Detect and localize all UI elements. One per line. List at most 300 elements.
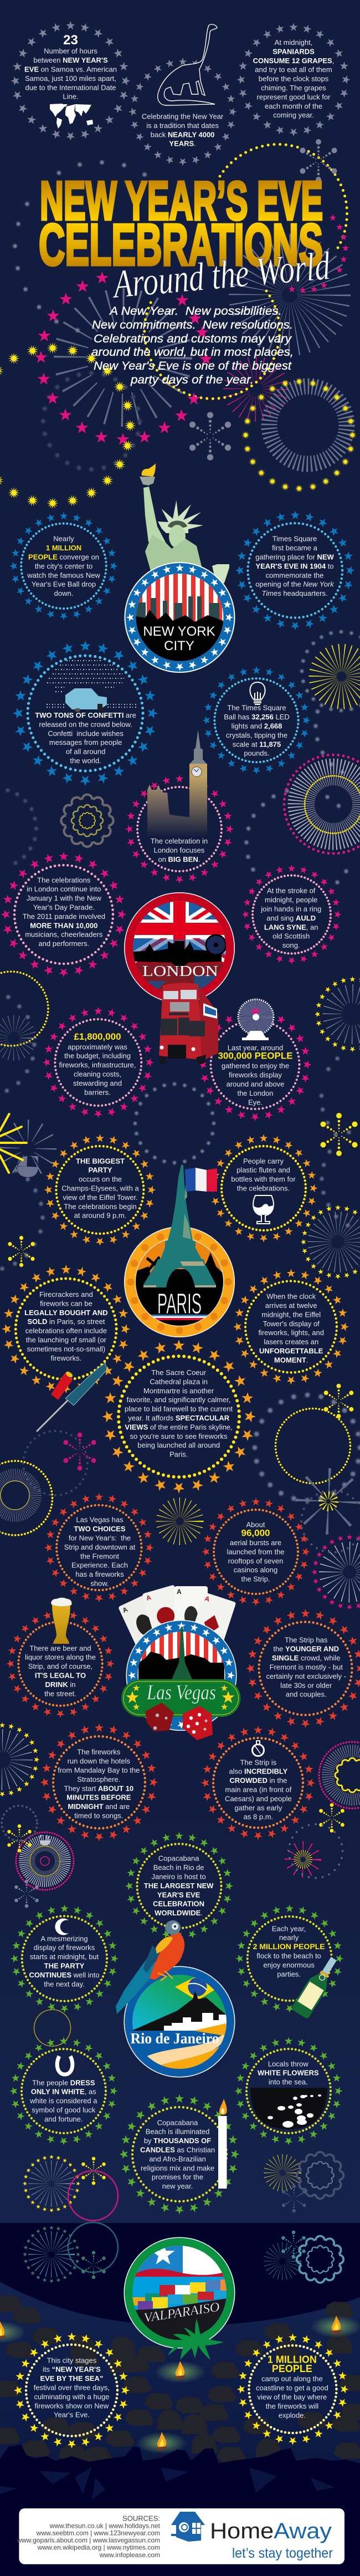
text: Ball: scale at 11,875: [233, 740, 281, 748]
panel: London budget: [43, 1007, 154, 1118]
panel: Copacabana largest celebration: [125, 1832, 233, 1940]
text: beer: IT'S LEGAL TO: [35, 1672, 86, 1680]
intro text: around the world, but in most places,: [91, 346, 294, 359]
text: younger and single: certainly not exclusively -: [266, 1672, 346, 1680]
text: parade: and performers.: [38, 939, 89, 948]
panel: unforgettable moment: [233, 1269, 349, 1385]
text: beer: There are beer and: [29, 1644, 91, 1652]
text: candles: religions mix and make: [141, 2164, 214, 2172]
icon: HomeAway house: [171, 2512, 205, 2542]
text: Auld Lang Syne: LANG SYNE, an: [264, 923, 318, 931]
panel: new year's eve by the sea: [14, 2332, 130, 2449]
text: younger and single: SINGLE crowd, while: [272, 1654, 340, 1662]
icon: London Eye: [238, 999, 274, 1040]
text: flowers: WHITE FLOWERS: [258, 2069, 319, 2077]
icon: French flag: [185, 1168, 217, 1192]
text: grapes: before the clock stops: [259, 75, 329, 83]
intro text: New Year's Eve is one of the biggest: [94, 360, 292, 372]
panel: Big Ben: [125, 730, 234, 883]
text: biggest party: view of the Eiffel Tower.: [63, 1193, 138, 1202]
text: by the sea: EVE BY THE SEA”: [40, 2374, 103, 2383]
fireworks behind title and intro: [0, 139, 357, 509]
text: Sacre Coeur: The Sacre Coeur: [151, 1368, 207, 1377]
text: Ball: crystals, tipping the: [226, 731, 287, 739]
panel: 300,000 people: [199, 999, 311, 1121]
text: 2 million: enjoy enormous: [263, 1961, 315, 1969]
text: largest: CELEBRATION: [153, 1900, 204, 1908]
fireworks: New York and London side decorations: [4, 629, 360, 886]
campfires: [0, 2316, 360, 2454]
text: budget: fireworks, infrastructure,: [59, 1061, 136, 1069]
text: camp out: the fireworks will: [266, 2402, 318, 2410]
text: flutes: plastic flutes and: [236, 1166, 290, 1174]
sources: SOURCES:: [122, 2514, 160, 2522]
text: 1 million: Nearly: [53, 535, 74, 543]
text: largest: WORLDWIDE.: [155, 1909, 203, 1917]
Paris badge with Eiffel Tower: [124, 1165, 235, 1337]
text: biggest party: PARTY: [88, 1166, 112, 1174]
text: confetti: messages from people: [49, 738, 122, 747]
text: grapes: each month of the: [265, 102, 322, 110]
Valparaiso badge: [124, 2237, 235, 2360]
text: firecrackers: sometimes not-so-small): [27, 1345, 105, 1353]
text: budget: the budget, including: [64, 1052, 131, 1060]
text: aerial bursts: aerial bursts are: [230, 1539, 281, 1547]
fireworks: London and Paris side decorations: [0, 972, 360, 1279]
text: candles: new year.: [162, 2182, 193, 2190]
text: Times Square: Times Square: [272, 535, 317, 543]
text: aerial bursts: casinos along: [234, 1566, 277, 1574]
text: flowers: into the sea.: [269, 2078, 308, 2086]
logo: HomeAway: HomeAway: [210, 2519, 332, 2543]
text: Sacre Coeur: Montmartre is another: [143, 1387, 214, 1395]
text: two choices: Las Vegas has: [76, 1516, 124, 1524]
text: mesmerizing: the next day.: [44, 1980, 85, 1988]
text: largest: THE LARGEST NEW: [144, 1882, 214, 1890]
panel: firecrackers: [2, 1265, 130, 1432]
text: hours between Samoa: Number of hours: [44, 47, 97, 55]
text: aerial bursts: the Strip.: [241, 1575, 270, 1583]
text: crowded: gather as early: [234, 1803, 282, 1812]
text: two choices: for New Year's: the: [69, 1534, 131, 1542]
text: younger and single: The Strip has: [285, 1635, 328, 1644]
text: mesmerizing: CONTINUES well into: [29, 1971, 100, 1979]
text: last year: 300,000 PEOPLE: [218, 1051, 293, 1061]
text: 1 million: down.: [54, 589, 73, 597]
icon: flowers on the sea: [250, 2088, 327, 2129]
panel: thousands of candles: [120, 2094, 239, 2215]
icon: rocket and firecracker: [37, 1363, 107, 1432]
text: younger and single: late 30s or older: [280, 1681, 332, 1689]
footer panel: [16, 2508, 344, 2564]
text: 1 million: watch the famous New: [27, 571, 100, 579]
text: last year: Last year, around: [228, 1044, 283, 1052]
text: candles: by THOUSANDS OF: [144, 2137, 211, 2145]
text: Eiffel display: arrives at twelve: [265, 1301, 317, 1310]
text: last year: gathered to enjoy the: [222, 1062, 289, 1070]
icon: Vegas badge: [126, 1620, 237, 1731]
panel: 1 million people: [9, 512, 118, 620]
text: confetti: Confetti include wishes: [48, 729, 124, 738]
panel: Spanish grapes: [236, 23, 351, 136]
text: tradition: YEARS.: [169, 140, 196, 148]
text: firecrackers: fireworks can be: [40, 1299, 92, 1307]
text: candles: promises for the: [152, 2173, 203, 2181]
text: parade: MORE THAN 10,000: [30, 921, 97, 929]
icon: horseshoe: [57, 2056, 73, 2074]
panel: fireworks timed to songs: [40, 1724, 158, 1841]
text: 2 million: flock to the beach to: [256, 1952, 321, 1960]
panel: 1 million people camp: [237, 2333, 348, 2445]
text: hours between Samoa: Line.: [63, 93, 79, 101]
sources: www.seebtm.com | www.123newyear.com: [36, 2529, 160, 2537]
text: firecrackers: celebrations often include: [25, 1327, 107, 1335]
text: Las Vegas: Las Vegas: [146, 1681, 216, 1704]
text: confetti: TWO TONS OF CONFETTI are: [35, 711, 136, 719]
text: mesmerizing: A mesmerizing: [40, 1934, 88, 1943]
sources: www.infoplease.com: [99, 2551, 160, 2559]
text: Sacre Coeur: Paris.: [169, 1450, 188, 1459]
text: last year: fireworks display: [229, 1071, 282, 1079]
text: Times Square: opening of the New York: [255, 580, 334, 589]
text: parade: musicians, cheerleaders: [25, 931, 103, 939]
rocks: [0, 2296, 360, 2463]
text: Rio de Janeiro: Rio de Janeiro: [131, 2030, 219, 2047]
text: Eiffel display: lasers creates an: [264, 1338, 318, 1346]
text: 2 million: nearly: [279, 1934, 299, 1942]
sources: www.thesun.co.uk | www.holidays.net: [49, 2522, 161, 2530]
text: Sacre Coeur: VIEWS of the entire Paris skyline,: [125, 1423, 233, 1431]
title: [39, 170, 323, 278]
text: flutes: People carry: [243, 1157, 284, 1165]
panel: dress only in white: [9, 2037, 118, 2145]
text: 1 million: 1 MILLION: [46, 544, 81, 552]
text: crowded: Caesars) and people: [225, 1795, 292, 1803]
panel: London parade: [1, 852, 126, 977]
text: 2 million: Each year,: [272, 1924, 306, 1933]
text: camp out: explode.: [279, 2411, 306, 2419]
icon: playing cards: A: [145, 1593, 152, 1602]
text: by the sea: culminating with a huge: [34, 2393, 109, 2401]
panel: the strip crowd: [246, 1609, 360, 1728]
text: crowded: also INCREDIBLY: [229, 1767, 287, 1776]
text: grapes: chiming. The grapes: [261, 84, 326, 92]
text: camp out: camp out along the: [261, 2375, 323, 2383]
text: beer: Strip, and of course,: [28, 1662, 92, 1670]
text: Paris: PARIS: [157, 1288, 202, 1320]
text: last year: Eye.: [248, 1098, 263, 1106]
text: Times Square: YEAR'S EVE IN 1904 to: [255, 562, 334, 570]
text: biggest party: occurs on the: [79, 1175, 122, 1183]
text: Ball: lights and 2,668: [232, 722, 282, 730]
text: 1 million: PEOPLE converge on: [28, 553, 99, 561]
panel: 2 million people: [235, 1904, 343, 2020]
text: largest: YEAR'S EVE: [157, 1890, 200, 1899]
text: beer: liquor stores along the: [25, 1653, 96, 1662]
text: biggest party: at around 9 p.m.: [74, 1212, 126, 1220]
text: Auld Lang Syne: join hands in a ring: [260, 904, 321, 913]
text: Times Square: Times headquarters.: [261, 589, 328, 597]
text: last year: the London: [237, 1089, 274, 1097]
text: London: LONDON: [142, 963, 218, 979]
text: Auld Lang Syne: At the stroke of: [267, 887, 316, 895]
text: camp out: PEOPLE: [272, 2363, 312, 2374]
fireworks: Paris and Vegas side decorations: [0, 1384, 360, 1797]
sources: [16, 2514, 161, 2559]
text: hours between Samoa: Samoa, just 100 miles apart,: [25, 74, 116, 83]
panel: two tons of confetti: [13, 641, 158, 786]
text: Auld Lang Syne: midnight, people: [265, 896, 317, 904]
text: parade: Year's Day Parade.: [33, 903, 95, 912]
text: by the sea: its “NEW YEAR'S: [43, 2365, 101, 2374]
text: hours between Samoa: between NEW YEAR'S: [33, 56, 108, 64]
icon: green plaque: [121, 1679, 240, 1717]
text: 1 million: the city's center to: [35, 562, 92, 570]
text: New York City: CITY: [164, 638, 194, 653]
text: budget: approximately was: [68, 1042, 127, 1051]
panel: 96,000 aerial bursts: [202, 1497, 310, 1606]
text: camp out: coastline to get a good: [256, 2384, 328, 2392]
text: younger and single: the YOUNGER AND: [273, 1645, 339, 1653]
text: aerial bursts: rooftops of seven: [228, 1557, 283, 1565]
icon: playing cards: [118, 1585, 236, 1649]
text: Sacre Coeur: favorite, and significantly calmer,: [127, 1396, 231, 1404]
text: timed to songs: MIDNIGHT and are: [68, 1802, 130, 1811]
text: tradition: is a tradition that dates: [146, 121, 219, 130]
icon: playing cards: A: [204, 1594, 211, 1603]
icon: Eiffel Tower: [143, 1165, 216, 1287]
text: Eiffel display: When the clock: [266, 1292, 316, 1301]
text: Auld Lang Syne: song.: [282, 941, 300, 949]
Valparaiso hillside: [0, 2282, 360, 2505]
text: Eiffel display: MOMENT.: [274, 1356, 308, 1364]
text: hours between Samoa: EVE on Samoa vs. American: [24, 65, 117, 73]
text: Times Square: commemorate the: [266, 571, 323, 579]
icon: NYC badge: [124, 562, 235, 673]
intro text: A New Year. New possibilities.: [109, 305, 282, 318]
text: Auld Lang Syne: and sing AULD: [266, 914, 316, 922]
text: timed to songs: from Mandalay Bay to the: [58, 1766, 140, 1774]
text: timed to songs: timed to songs.: [74, 1811, 123, 1819]
text: grapes: represent good luck for: [257, 93, 331, 101]
text: Big Ben: The celebration in: [151, 837, 208, 845]
icon: London badge: [124, 892, 235, 1003]
intro text: New commitments. New resolutions.: [92, 319, 293, 331]
text: Eiffel display: midnight, the Eiffel: [261, 1310, 321, 1318]
icon: confetti: [47, 661, 137, 707]
Valparaiso night background: [0, 2223, 360, 2576]
text: grapes: and try to eat all of them: [255, 65, 332, 74]
text: candles: Copacabana: [157, 2118, 198, 2127]
text: by the sea: festival over three days,: [34, 2383, 110, 2391]
fireworks: reflected in Valparaiso sky: [23, 2222, 343, 2283]
text: budget: cleaning costs,: [74, 1070, 121, 1079]
text: candles: Beach is illuminated: [146, 2128, 209, 2136]
text: by the sea: This city stages: [47, 2356, 97, 2364]
text: biggest party: Champs-Elysees, with a: [61, 1184, 139, 1193]
text: firecrackers: SOLD in Paris, so street: [27, 1317, 105, 1326]
panel: plastic flutes: [209, 1134, 318, 1243]
icon: Rio badge: [124, 1966, 235, 2077]
text: Valparaiso: VALPARAISO: [143, 2300, 220, 2325]
text: Sacre Coeur: year. It affords SPECTACULAR: [128, 1414, 229, 1422]
panel: tradition 4000 years: [128, 24, 237, 166]
text: Sacre Coeur: being launched all around: [137, 1441, 220, 1449]
text: parade: January 1 with the New: [27, 894, 101, 902]
text: dress in white: white is considered a: [29, 2097, 97, 2105]
panel: beer and liquor: [6, 1598, 115, 1718]
text: confetti: the world.: [70, 757, 101, 765]
text: timed to songs: They start ABOUT 10: [64, 1784, 133, 1792]
Las Vegas badge: [118, 1585, 240, 1740]
text: largest: Janeiro is host to: [151, 1872, 206, 1880]
text: biggest party: THE BIGGEST: [76, 1157, 125, 1165]
text: two choices: show.: [90, 1579, 109, 1587]
text: crowded: The Strip is: [240, 1758, 277, 1766]
text: budget: stewarding and: [73, 1079, 122, 1087]
text: younger and single: and couples.: [286, 1690, 327, 1699]
palm silhouettes: [0, 2445, 360, 2576]
text: dress in white: symbol of good luck: [32, 2106, 96, 2114]
intro text: party days of the year.: [130, 374, 254, 386]
icon: car: [65, 688, 107, 712]
icon: light bulb: [250, 682, 265, 704]
panel: the biggest party: [44, 1134, 156, 1246]
text: camp out: view of the bay where: [258, 2393, 327, 2401]
text: confetti: of all around: [66, 748, 105, 756]
text: two choices: Experience. Each: [71, 1561, 128, 1570]
panel: Times Square Ball: [202, 666, 311, 774]
sources: www.goparis.about.com | www.lasvegassun.com: [16, 2537, 160, 2544]
text: dress in white: and fortune.: [44, 2115, 83, 2123]
icon: Big Ben and Parliament: [147, 730, 207, 837]
text: flowers: Locals throw: [268, 2059, 308, 2068]
text: aerial bursts: About: [246, 1521, 265, 1529]
icon: crescent moon: [55, 1919, 69, 1935]
text: timed to songs: MINUTES BEFORE: [66, 1793, 131, 1802]
text: grapes: coming year.: [273, 111, 314, 119]
text: Eiffel display: fireworks, lights, and: [258, 1328, 324, 1337]
text: mesmerizing: display of fireworks: [34, 1944, 95, 1952]
icon: playing cards: A: [177, 1588, 182, 1596]
fireworks: above Valparaiso: [23, 2152, 343, 2221]
text: dress in white: ONLY IN WHITE, as: [31, 2088, 96, 2096]
text: budget: barriers.: [84, 1088, 111, 1096]
text: by the sea: fireworks show on New: [35, 2401, 109, 2410]
panel: Auld Lang Syne: [241, 865, 342, 964]
text: crowded: CROWDED in the: [229, 1776, 287, 1785]
text: tradition: back NEARLY 4000: [151, 130, 214, 139]
text: mesmerizing: THE PARTY: [44, 1962, 85, 1970]
text: 2 million: parties.: [277, 1970, 301, 1978]
icon: green palm: [168, 2318, 224, 2360]
icon: dinosaur: [158, 24, 217, 105]
text: tradition: Celebrating the New Year: [142, 112, 224, 121]
icon: champagne bottle: [291, 1954, 342, 2020]
icon: red bus: [159, 983, 218, 1065]
icon: candle: [218, 2099, 227, 2189]
panel: white flowers: [234, 2037, 343, 2145]
text: confetti: released on the crowd below.: [39, 720, 132, 728]
text: largest: Beach in Rio de: [153, 1863, 204, 1872]
intro text: [91, 305, 294, 386]
text: candles: and Afro-Brazilian: [149, 2155, 206, 2163]
text: timed to songs: run down the hotels: [68, 1757, 131, 1765]
icon: stopwatch: [253, 1741, 264, 1756]
London badge with bus: [124, 892, 235, 1065]
text: last year: around and above: [227, 1080, 284, 1088]
icon: playing cards: A: [121, 1605, 129, 1614]
text: budget: £1,800,000: [74, 1031, 121, 1042]
panel: mesmerizing display: [11, 1904, 119, 2013]
text: younger and single: Fremont is mostly - but: [270, 1663, 343, 1672]
text: two choices: TWO CHOICES: [74, 1525, 126, 1533]
text: candles: CANDLES as Christian: [140, 2146, 215, 2154]
text: Eiffel display: UNFORGETTABLE: [259, 1347, 323, 1355]
text: hours between Samoa: due to the International Date: [25, 83, 116, 91]
sources: www.en.wikipedia.org | www.nytimes.com: [37, 2544, 160, 2552]
text: 2 million: 2 MILLION PEOPLE: [253, 1942, 325, 1951]
icon: Statue of Liberty: [140, 463, 229, 583]
text: beer: the street.: [44, 1689, 76, 1698]
New York badge with Statue of Liberty: [124, 463, 235, 673]
text: by the sea: Year's Eve.: [54, 2411, 90, 2419]
text: Big Ben: London focuses: [154, 846, 205, 854]
text: firecrackers: Firecrackers and: [39, 1290, 93, 1299]
tagline: let’s stay together: [232, 2546, 333, 2561]
text: parade: The celebrations: [37, 876, 91, 884]
text: dress in white: The people DRESS: [32, 2078, 95, 2087]
icon: beer glass: [51, 1598, 72, 1644]
text: New York City: NEW YORK: [143, 624, 215, 639]
text: Sacre Coeur: Cathedral plaza in: [150, 1377, 208, 1386]
text: beer: DRINK in: [45, 1680, 75, 1689]
panel: 23 hours: [11, 21, 130, 141]
text: two choices: the Fremont: [80, 1552, 119, 1560]
icon: world map: [50, 104, 93, 129]
text: biggest party: The celebrations begin: [64, 1202, 137, 1210]
icon: parrot: [116, 1920, 184, 2014]
text: Sacre Coeur: place to bid farewell to the current: [125, 1405, 233, 1413]
text: camp out: 1 MILLION: [268, 2354, 317, 2365]
text: parade: The 2011 parade involved: [23, 912, 105, 921]
icon: dice: [145, 1703, 213, 1740]
panel: incredibly crowded: [201, 1726, 315, 1840]
Rio de Janeiro badge with parrot: [116, 1920, 235, 2077]
text: grapes: CONSUME 12 GRAPES,: [253, 57, 334, 65]
text: parade: in London continue into: [27, 885, 101, 893]
text: Ball: pounds.: [244, 749, 270, 758]
big number 23: 23: [63, 33, 78, 48]
text: flutes: bottles with them for: [231, 1175, 296, 1183]
text: crowded: as 8 p.m.: [244, 1813, 273, 1821]
text: aerial bursts: launched from the: [227, 1547, 285, 1556]
icon: Paris badge: [124, 1226, 235, 1337]
panel: Vegas two choices: [44, 1493, 154, 1602]
text: firecrackers: the launching of small (or: [26, 1336, 107, 1344]
panel: Times Square 1904: [235, 510, 355, 630]
text: timed to songs: Stratosphere.: [77, 1775, 120, 1783]
text: Big Ben: on BIG BEN.: [158, 855, 200, 863]
text: Times Square: first became a: [272, 544, 318, 552]
text: crowded: main area (in front of: [225, 1786, 292, 1794]
fireworks: Rio side decorations: [2, 1742, 360, 2046]
text: timed to songs: The fireworks: [77, 1748, 121, 1756]
icon: glass: [253, 1195, 274, 1224]
text: two choices: Strip and downtown at: [64, 1543, 136, 1551]
text: Auld Lang Syne: old Scottish: [272, 932, 310, 941]
text: 1 million: Year's Eve Ball drop: [32, 580, 96, 589]
